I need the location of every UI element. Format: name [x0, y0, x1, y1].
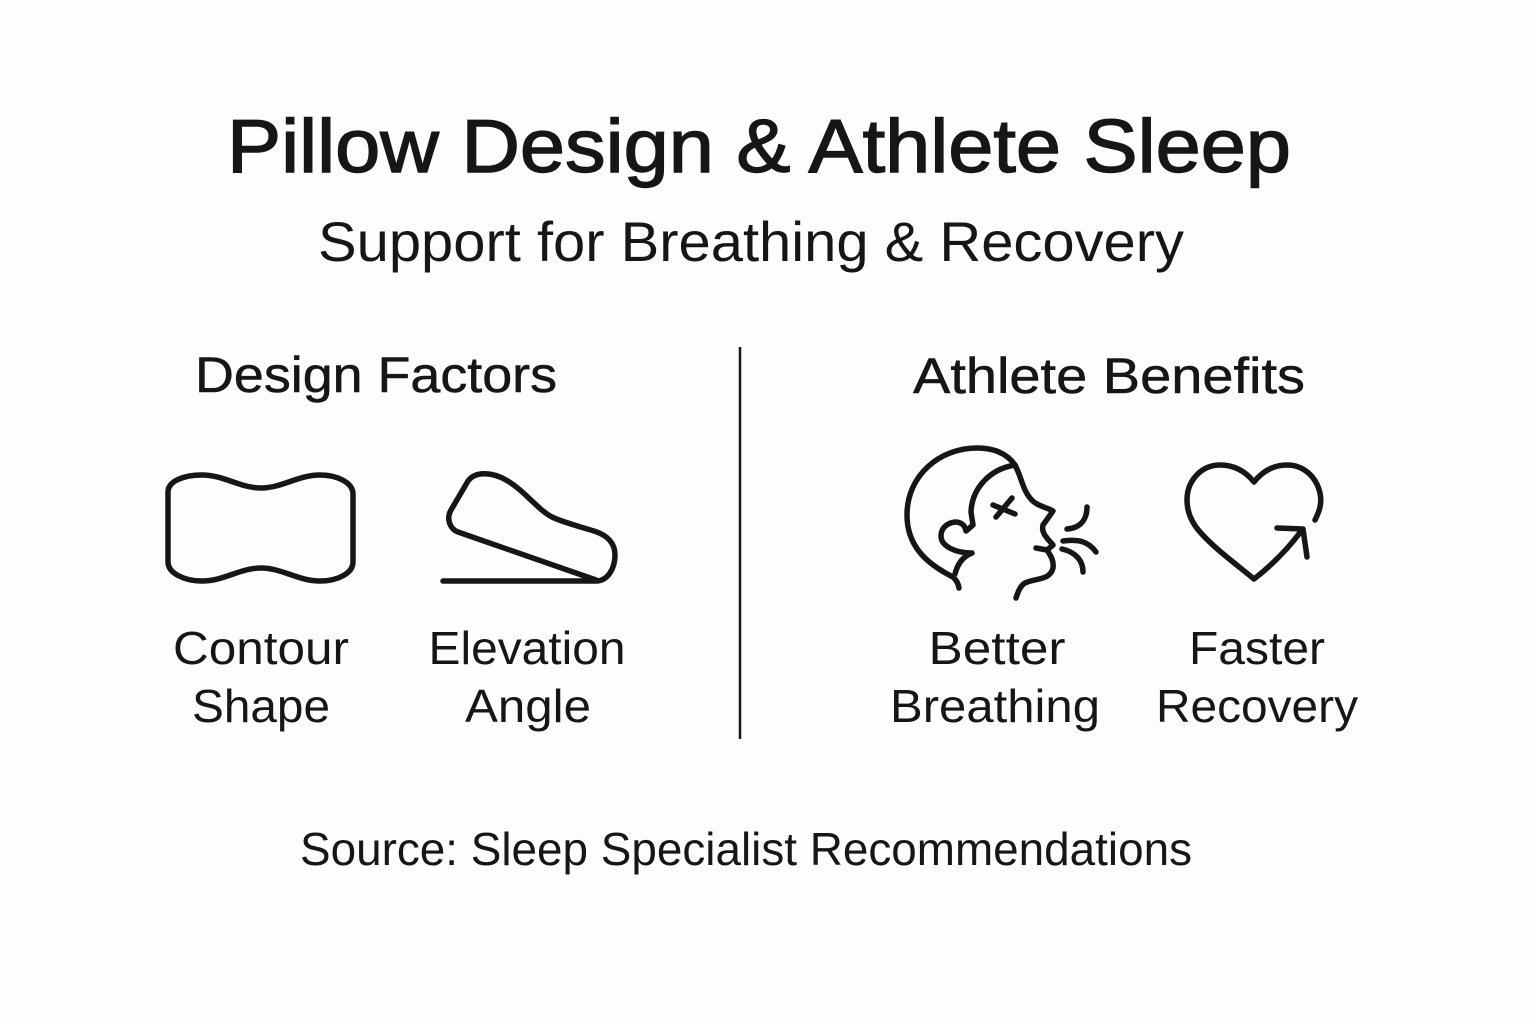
label: elevation angle: Elevation — [428, 622, 626, 674]
icon: heart with recovery arrow — [1187, 465, 1321, 579]
label: contour shape: Contour — [173, 622, 349, 674]
subtitle: Support for Breathing & Recovery — [318, 210, 1184, 273]
heading: athlete benefits: Athlete Benefits — [913, 348, 1305, 404]
label: contour shape second line: Shape — [192, 680, 330, 732]
label: better breathing second line: Breathing — [890, 680, 1100, 732]
source note: Source: Sleep Specialist Recommendations — [300, 823, 1192, 875]
icon: contour pillow shape — [168, 475, 353, 581]
label: faster recovery: Faster — [1189, 622, 1325, 674]
label: elevation angle second line: Angle — [465, 680, 591, 732]
panel: athlete benefits — [890, 348, 1358, 732]
panel: design factors — [168, 347, 626, 732]
center divider — [739, 347, 741, 739]
heading: design factors: Design Factors — [195, 347, 557, 403]
label: faster recovery second line: Recovery — [1156, 680, 1358, 732]
icon: elevation angle pillow — [443, 474, 615, 581]
icon: head breathing — [907, 448, 1096, 598]
title: Pillow Design & Athlete Sleep — [227, 104, 1291, 188]
label: better breathing: Better — [928, 622, 1066, 674]
